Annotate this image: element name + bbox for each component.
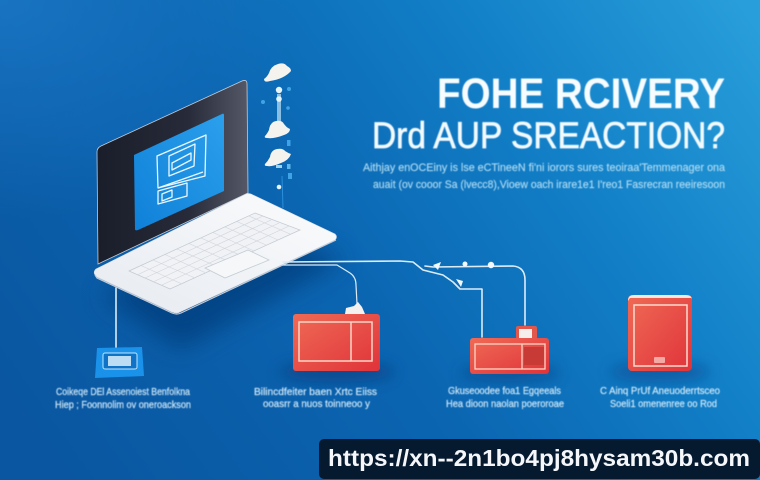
chip icon bbox=[95, 347, 144, 378]
cable to first drive bbox=[283, 265, 357, 304]
screen window icon bbox=[157, 135, 206, 204]
floating data dots bbox=[261, 87, 292, 208]
book drive top edge bbox=[628, 295, 692, 301]
device top connector bbox=[516, 326, 537, 339]
drive panels bbox=[299, 322, 372, 361]
description bbox=[363, 162, 726, 191]
description line 1: Aithjay enOCEiny is lse eCTineeN fi'ni iorors sures teoiraa'Temmenager ona bbox=[363, 162, 726, 174]
device body bbox=[470, 338, 549, 374]
caption 3: Hea dioon naolan poeroroae bbox=[446, 398, 564, 410]
hat-shaped cloud icon 2 bbox=[265, 121, 290, 138]
title line 2: Drd AUP SREACTION? bbox=[372, 115, 725, 156]
cable to chip bbox=[115, 288, 117, 350]
caption 3 bbox=[446, 385, 564, 410]
keyboard bbox=[129, 213, 300, 289]
book drive body bbox=[628, 295, 692, 371]
device panels bbox=[475, 344, 545, 369]
drive top connector bbox=[345, 302, 365, 314]
cable trunk bbox=[283, 261, 482, 337]
hat-shaped cloud icon 3 bbox=[265, 149, 291, 166]
title bbox=[372, 70, 725, 156]
caption 4 bbox=[600, 385, 720, 410]
base front edge bbox=[95, 240, 336, 314]
drive body bbox=[293, 314, 380, 371]
book drive shadow bbox=[610, 362, 710, 382]
url bar bbox=[319, 439, 760, 479]
laptop base bbox=[94, 194, 336, 313]
book drive label bbox=[654, 357, 665, 363]
screen display bbox=[134, 114, 224, 230]
caption 4: Soeli1 omenenree oo Rod bbox=[610, 398, 717, 410]
vertical link bbox=[277, 94, 281, 122]
caption 1 bbox=[55, 386, 191, 411]
cables bbox=[116, 261, 525, 350]
book drive panel bbox=[634, 305, 687, 366]
drive shadow bbox=[279, 362, 395, 382]
caption 1: Coikeqe DEl Assenoiest Benfolkna bbox=[56, 386, 190, 398]
device shadow bbox=[460, 365, 560, 381]
cable to second drive nub bbox=[425, 266, 525, 325]
cable joints bbox=[433, 262, 494, 287]
caption 4: C Ainq PrUf Aneuoderrtsceo bbox=[600, 385, 720, 397]
step 3: red device bbox=[446, 326, 564, 410]
description line 2: auait (ov cooor Sa (lvecc8),Vioew oach irare1e1 I'reo1 Fasrecran reeiresoon bbox=[373, 179, 725, 191]
step 1: chip bbox=[55, 347, 191, 411]
laptop shadow bbox=[100, 225, 345, 350]
laptop screen bezel bbox=[97, 80, 248, 264]
caption 2 bbox=[254, 386, 377, 410]
title line 1: FOHE RCIVERY bbox=[437, 70, 725, 118]
caption 3: Gkuseoodee foa1 Egqeeals bbox=[448, 385, 561, 397]
caption 2: ooasrr a nuos toinneoo y bbox=[263, 398, 371, 410]
hat-shaped cloud icon 1 bbox=[264, 63, 291, 82]
step 2: red drive bbox=[254, 302, 395, 410]
laptop bbox=[94, 80, 345, 350]
step 4: red book drive bbox=[600, 295, 720, 410]
caption 2: Bilincdfeiter baen Xrtc Eiiss bbox=[254, 386, 377, 398]
trackpad bbox=[205, 250, 269, 278]
url text: https://xn--2n1bo4pj8hysam30b.com bbox=[328, 445, 750, 471]
caption 1: Hiep ; Foonnolim ov oneroackson bbox=[55, 399, 191, 411]
cloud connector column bbox=[261, 63, 292, 208]
